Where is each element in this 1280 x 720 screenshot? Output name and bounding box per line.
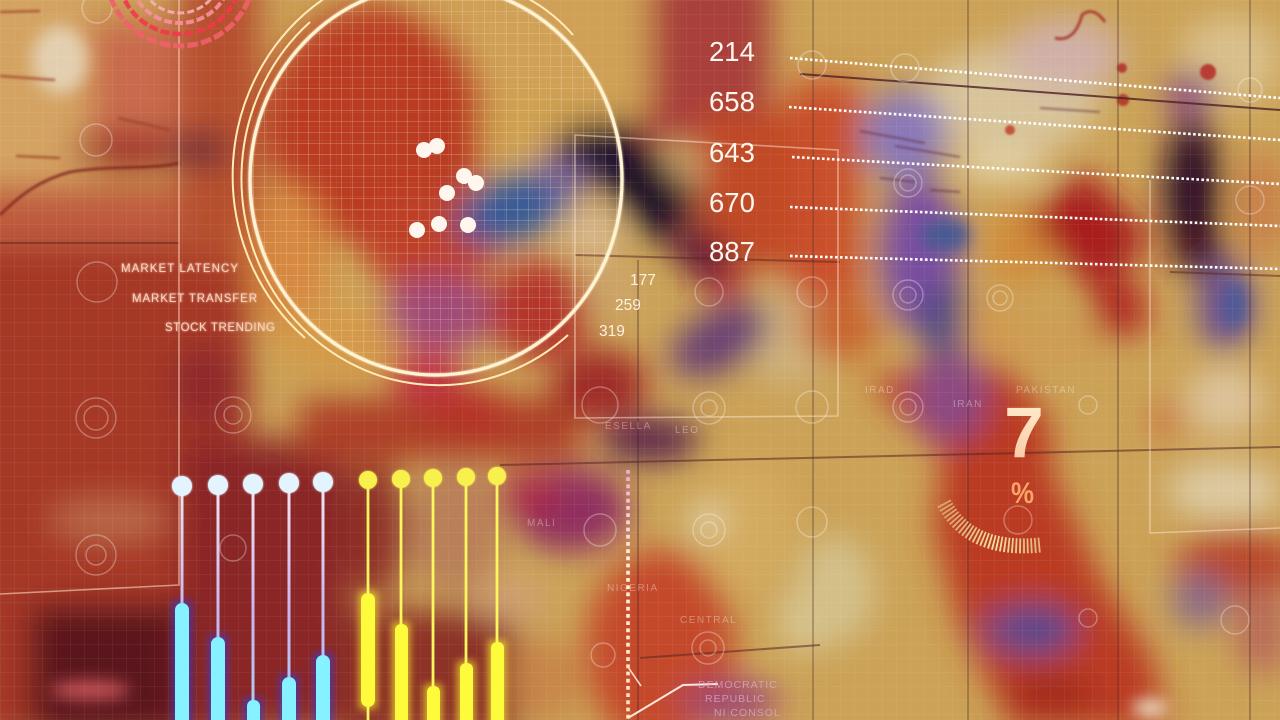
market labels (121, 263, 275, 334)
faint map labels: MALI (527, 518, 556, 529)
percentage gauge (944, 394, 1044, 546)
faint callout text (698, 679, 781, 719)
bar group: blue (172, 472, 333, 720)
small numbers near circle: 259 (615, 297, 641, 314)
ring: main circle (250, 0, 622, 375)
faint callout text: NI CONSOL (714, 707, 781, 719)
faint map labels: CENTRAL (680, 615, 737, 626)
value list with dotted leader lines: 887 (709, 236, 755, 267)
value list with dotted leader lines: 670 (709, 187, 755, 218)
value: 7: 7 (1004, 394, 1044, 473)
value list with dotted leader lines: 643 (709, 137, 755, 168)
small numbers near circle (599, 272, 656, 340)
value list with dotted leader lines: 658 (709, 86, 755, 117)
ring: outer arcs (233, 0, 573, 385)
faint callout text: DEMOCRATIC (698, 679, 778, 691)
faint map labels: LEO (675, 425, 700, 436)
bottom centre (585, 550, 735, 720)
bar group: yellow (359, 467, 506, 720)
faint callout text: REPUBLIC (705, 693, 766, 705)
value list with dotted leader lines (709, 36, 1280, 269)
radar fragment, top left (106, 0, 254, 46)
right lower (867, 360, 1167, 720)
faint map labels: NIGERIA (607, 583, 659, 594)
market labels: STOCK TRENDING (165, 322, 275, 334)
unit: percent: % (1011, 477, 1034, 510)
radar circle with scatter points (233, 0, 622, 385)
faint map labels: ESELLA (605, 421, 652, 432)
scatter points (409, 138, 484, 238)
background: map details and rivers (0, 11, 1216, 215)
value list with dotted leader lines: 214 (709, 36, 755, 67)
dotted vertical callout with leader lines (628, 470, 718, 720)
top centre (640, 0, 770, 140)
right upper (790, 80, 860, 300)
small numbers near circle: 177 (630, 272, 656, 289)
faint map labels (527, 385, 1076, 626)
faint map labels: IRAN (953, 399, 983, 410)
faint map labels: PAKISTAN (1016, 385, 1076, 396)
left side (0, 240, 250, 720)
market labels: MARKET LATENCY (121, 263, 238, 275)
market labels: MARKET TRANSFER (132, 293, 257, 305)
small numbers near circle: 319 (599, 323, 625, 340)
faint map labels: IRAD (865, 385, 895, 396)
